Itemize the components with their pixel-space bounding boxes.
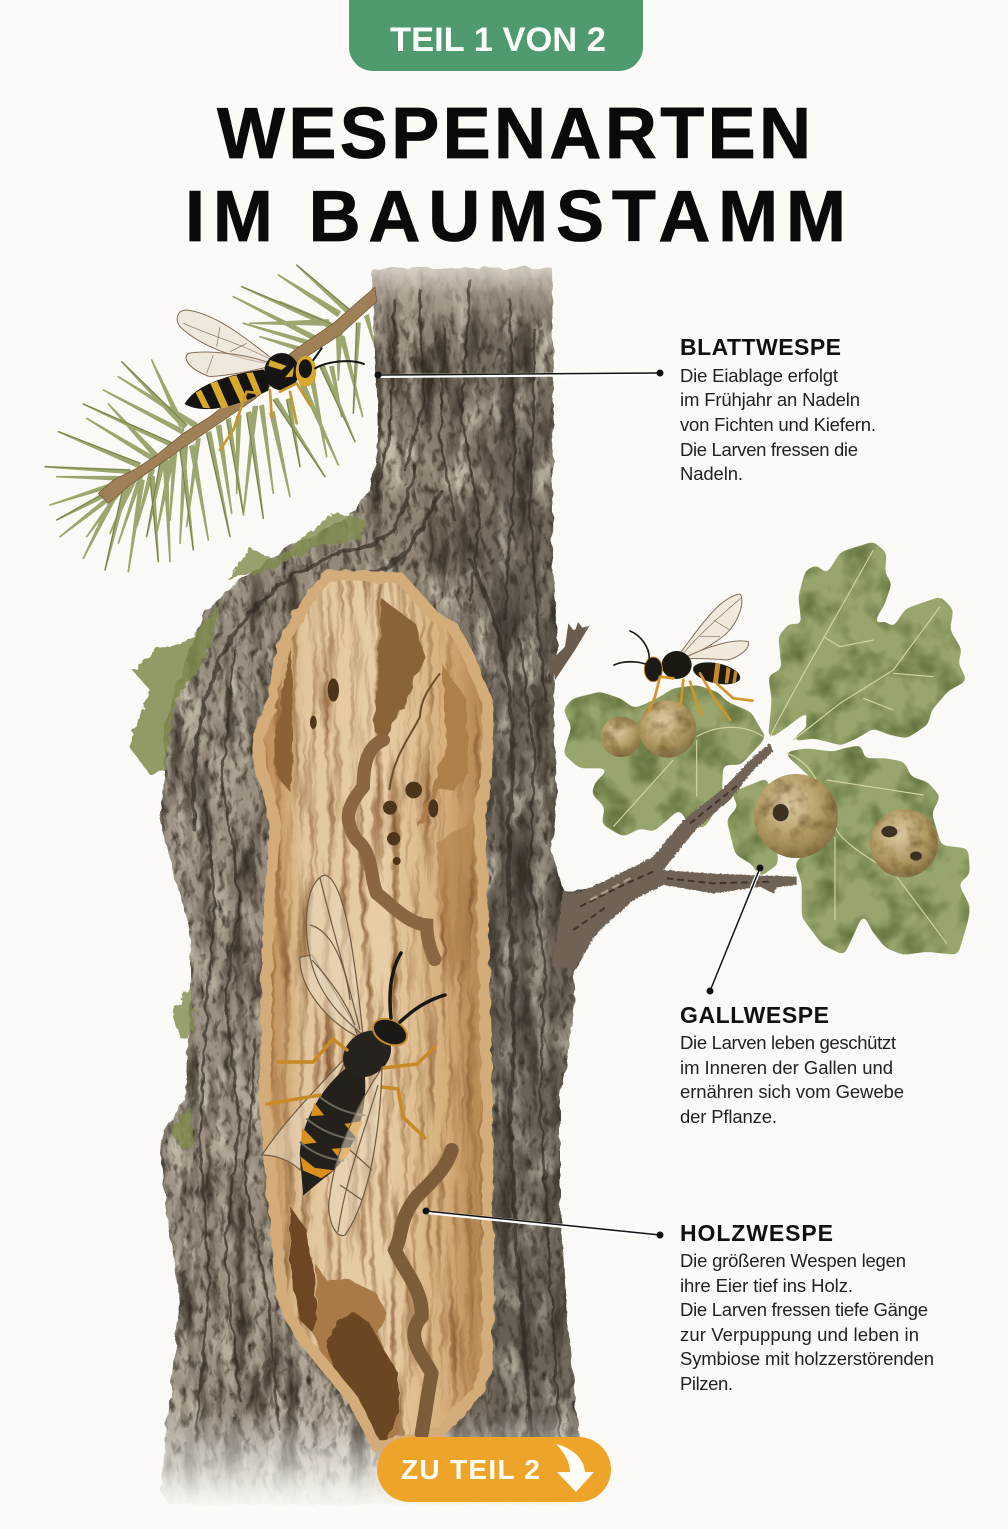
twig	[548, 623, 588, 677]
text block: Blattwespe: von Fichten und Kiefern.	[680, 414, 876, 435]
leader line: Holzwespe	[422, 1208, 664, 1238]
wings	[680, 594, 748, 660]
text block: Blattwespe: BLATTWESPE	[680, 334, 841, 360]
upper gallery tunnel	[348, 673, 440, 960]
text block: Holzwespe: Pilzen.	[680, 1373, 733, 1394]
leader line: Gallwespe	[706, 864, 764, 994]
text block: Holzwespe: Die größeren Wespen legen	[680, 1250, 906, 1271]
antennae	[614, 631, 649, 665]
abdomen	[181, 366, 272, 419]
lower pale bark patch	[268, 1340, 372, 1478]
lower right wing	[329, 1068, 382, 1236]
text block: Gallwespe: im Inneren der Gallen und	[680, 1057, 893, 1078]
title: IM BAUMSTAMM	[185, 177, 846, 257]
text block: Blattwespe: Die Eiablage erfolgt	[680, 365, 838, 386]
antennae	[390, 953, 445, 1022]
legs	[648, 673, 753, 720]
wasp on pine branch	[177, 310, 364, 450]
large horntail wasp on wood	[262, 875, 445, 1236]
text block: Blattwespe: Nadeln.	[680, 463, 743, 484]
tab: part indicator	[349, 0, 643, 71]
gall holes	[773, 804, 922, 861]
leader line: Blattwespe	[374, 370, 664, 378]
gall 1	[601, 716, 641, 757]
gall 2	[639, 700, 696, 758]
text block: Holzwespe: Die Larven fressen tiefe Gänge	[680, 1299, 928, 1320]
text block: Gallwespe: Die Larven leben geschützt	[680, 1032, 896, 1053]
head	[296, 356, 316, 387]
abdomen	[278, 1058, 382, 1206]
text block: Holzwespe: ihre Eier tief ins Holz.	[680, 1275, 853, 1296]
body	[691, 659, 742, 688]
needles	[45, 265, 373, 572]
lower dark cavities	[290, 1207, 398, 1450]
gall mottling	[597, 697, 943, 883]
text block: Blattwespe: Die Larven fressen die	[680, 439, 858, 460]
text block: Holzwespe: HOLZWESPE	[680, 1220, 833, 1246]
lower gallery tunnel	[395, 1150, 452, 1433]
wings	[177, 310, 275, 377]
leaves	[565, 543, 968, 953]
gall 3	[754, 774, 838, 858]
icon: curved arrow	[556, 1444, 594, 1492]
button: to part 2: ZU TEIL 2	[401, 1454, 540, 1485]
text block: Blattwespe: im Frühjahr an Nadeln	[680, 389, 860, 410]
text block: Gallwespe: ernähren sich vom Gewebe	[680, 1081, 904, 1102]
legs	[267, 1039, 435, 1138]
title	[185, 94, 846, 257]
text block: Holzwespe: Symbiose mit holzzerstörenden	[680, 1348, 934, 1369]
wood holes	[310, 678, 438, 865]
branch	[98, 287, 377, 503]
title: WESPENARTEN	[217, 94, 811, 174]
pine branch with needles	[45, 265, 377, 572]
text block: Gallwespe	[680, 1002, 904, 1127]
head	[369, 1014, 411, 1050]
upper dark cavities	[275, 598, 470, 960]
exposed wood cavity	[250, 570, 495, 1450]
legs	[220, 383, 310, 450]
thorax	[334, 1021, 400, 1087]
text block: Gallwespe: GALLWESPE	[680, 1002, 829, 1028]
leaf veins	[613, 550, 947, 943]
moss on trunk	[128, 512, 366, 1150]
tree trunk	[150, 260, 600, 1510]
leaf mottling	[553, 537, 977, 963]
thorax	[264, 353, 299, 390]
text block: Holzwespe: zur Verpuppung und leben in	[680, 1324, 919, 1345]
text block: Holzwespe	[680, 1220, 934, 1394]
side twig stub on trunk	[553, 622, 590, 680]
gall wasp	[614, 594, 753, 720]
gall 4	[870, 809, 938, 877]
oak galls	[597, 697, 943, 883]
upper wings	[262, 875, 363, 1170]
button: to part 2	[377, 1437, 611, 1502]
head	[644, 657, 662, 682]
antenna	[313, 348, 364, 368]
tab: part indicator: TEIL 1 VON 2	[390, 21, 606, 59]
text block: Blattwespe	[680, 334, 876, 484]
text block: Gallwespe: der Pflanze.	[680, 1106, 777, 1127]
oak branch with leaves	[548, 537, 977, 970]
branch wood	[553, 743, 797, 970]
